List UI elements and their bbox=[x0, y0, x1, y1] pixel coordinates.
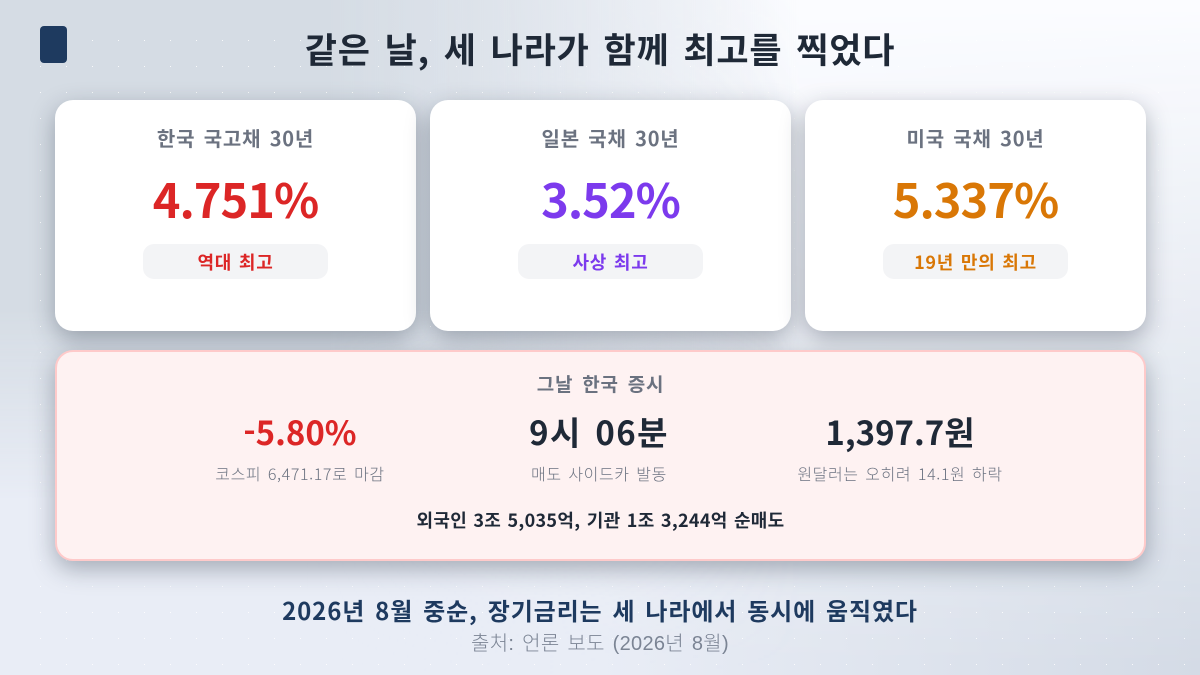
value: US yield: 5.337% bbox=[893, 163, 1058, 232]
panel: Japan bond card bbox=[430, 100, 791, 331]
card label: Japan: 일본 국채 30년 bbox=[542, 123, 680, 152]
value: Korea yield: 4.751% bbox=[153, 163, 318, 232]
badge: record high: 사상 최고 bbox=[572, 249, 649, 275]
badge: all-time high bbox=[143, 244, 328, 279]
badge: 19-year high bbox=[883, 244, 1068, 279]
title: 같은 날, 세 나라가 함께 최고를 찍었다 bbox=[305, 23, 895, 74]
card label: US: 미국 국채 30년 bbox=[906, 123, 1044, 152]
caption: exchange rate change: 원달러는 오히려 14.1원 하락 bbox=[797, 461, 1003, 485]
stat: sidecar time: 9시 06분 bbox=[529, 407, 669, 455]
panel: Korea bond card bbox=[55, 100, 416, 331]
badge: all-time high: 역대 최고 bbox=[197, 249, 274, 275]
card label: Korea: 한국 국고채 30년 bbox=[157, 123, 314, 152]
caption: KOSPI close: 코스피 6,471.17로 마감 bbox=[215, 461, 385, 485]
badge: 19-year high: 19년 만의 최고 bbox=[914, 249, 1037, 275]
badge: record high bbox=[518, 244, 703, 279]
footer takeaway: 2026년 8월 중순, 장기금리는 세 나라에서 동시에 움직였다 bbox=[282, 592, 918, 627]
stat: KOSPI drop: -5.80% bbox=[243, 407, 357, 455]
panel: Korean stock market that day bbox=[55, 350, 1146, 561]
stat: exchange rate: 1,397.7원 bbox=[825, 407, 975, 455]
caption: sell sidecar: 매도 사이드카 발동 bbox=[531, 461, 667, 485]
value: Japan yield: 3.52% bbox=[541, 163, 680, 232]
icon: logo badge bbox=[40, 26, 67, 63]
panel: US bond card bbox=[805, 100, 1146, 331]
panel heading: 그날 한국 증시 bbox=[537, 370, 664, 397]
source note: 출처: 언론 보도 (2026년 8월) bbox=[471, 633, 729, 655]
net selling summary: 외국인 3조 5,035억, 기관 1조 3,244억 순매도 bbox=[416, 507, 785, 533]
